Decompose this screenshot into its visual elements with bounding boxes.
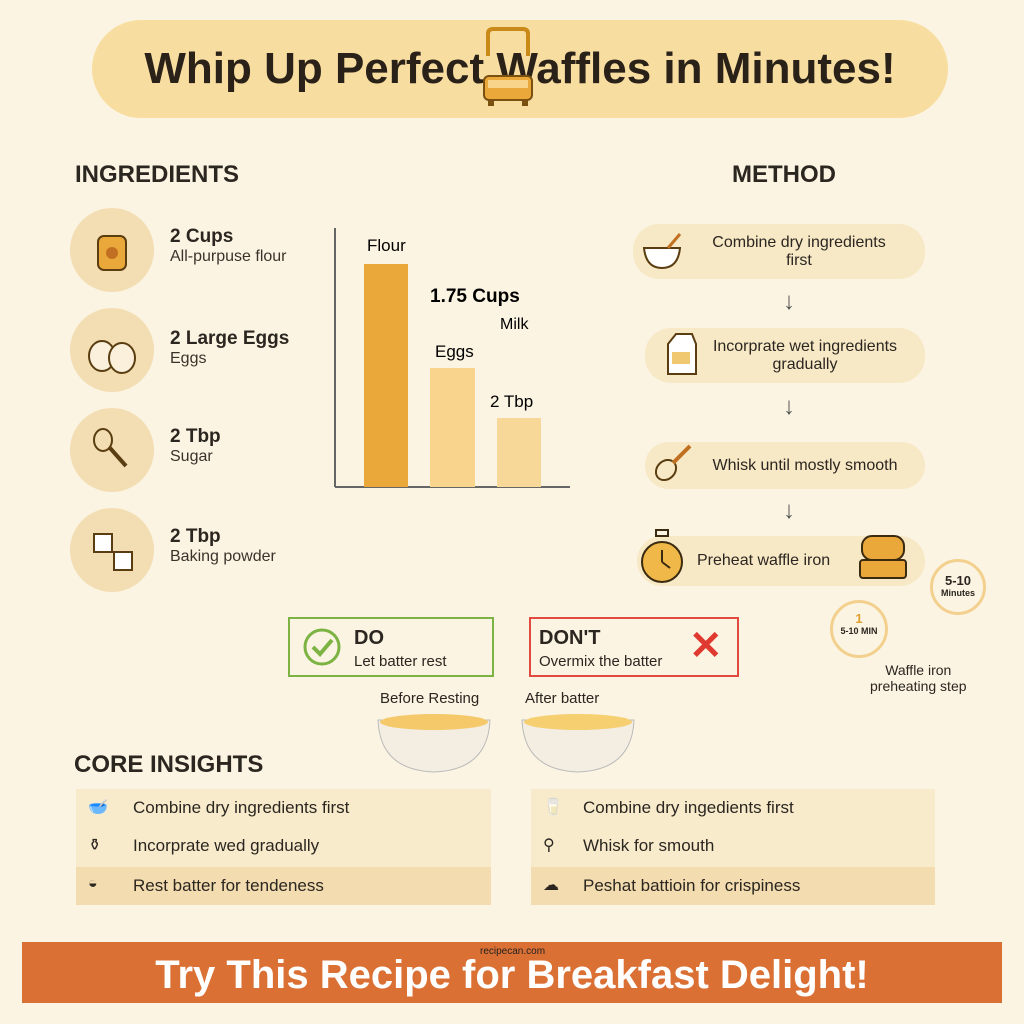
bowls: Before Resting [380, 690, 479, 707]
step 2: gradually [773, 356, 837, 372]
insights right: 🥛 [543, 799, 563, 816]
icon: bowl [642, 233, 682, 269]
insights right: ☁ [543, 877, 559, 894]
dont box: Overmix the batter [539, 653, 662, 670]
insights right: Whisk for smouth [583, 836, 714, 854]
step 2 [645, 328, 925, 383]
icon: whisk [655, 444, 692, 481]
insights left [76, 789, 491, 905]
insights left: ◒ [88, 875, 98, 892]
arrow: ↓ [783, 497, 795, 524]
ingredient: flour: All-purpuse flour [170, 248, 286, 265]
callout: preheating: 5-10 MIN [840, 626, 878, 636]
callout: preheating: preheating step [870, 678, 967, 694]
bar chart: 1.75 Cups [430, 286, 520, 307]
ingredient: sugar: Sugar [170, 448, 213, 465]
bar chart [334, 228, 570, 488]
title banner [92, 20, 948, 118]
ingredient: sugar: 2 Tbp [170, 426, 221, 447]
callout: preheating: 1 [855, 611, 863, 626]
ingredient: sugar [70, 408, 221, 492]
step 3: Whisk until mostly smooth [713, 456, 897, 474]
heading: core insights: CORE INSIGHTS [74, 751, 263, 778]
heading: ingredients: INGREDIENTS [75, 161, 239, 188]
bar chart: Eggs [435, 342, 474, 361]
bar chart: Milk [500, 316, 529, 333]
icon: waffle iron title [483, 27, 533, 106]
insights right: Peshat battioin for crispiness [583, 876, 800, 895]
insights right: ⚲ [543, 837, 555, 854]
dont box: ✕ [689, 624, 723, 668]
dont box [529, 617, 739, 677]
bowls: After batter [525, 690, 599, 707]
ingredient: eggs: 2 Large Eggs [170, 328, 289, 349]
insights left: 🥣 [88, 799, 108, 816]
ingredient: baking powder: Baking powder [170, 548, 276, 565]
title banner: Whip Up Perfect Waffles in Minutes! [144, 44, 896, 93]
badge: 5-10 minutes: Minutes [941, 588, 975, 598]
icon: timer [641, 529, 683, 583]
insights left: ⚱ [88, 837, 101, 854]
bar chart: Flour [367, 236, 406, 255]
bowls [378, 690, 634, 772]
callout: preheating [830, 600, 967, 694]
do box: DO [354, 627, 384, 649]
do box [288, 617, 494, 677]
step 2: Incorprate wet ingredients [713, 338, 897, 354]
step 1: first [786, 252, 812, 268]
insights left: Incorprate wed gradually [133, 836, 319, 854]
arrow: ↓ [783, 288, 795, 315]
step 1 [633, 224, 925, 279]
ingredient: eggs [70, 308, 289, 392]
badge: 5-10 minutes: 5-10 [945, 573, 971, 588]
step 4 [637, 536, 925, 586]
ingredient: baking powder [70, 508, 276, 592]
insights right [531, 789, 935, 905]
icon: milk carton [667, 333, 697, 375]
step 1: Combine dry ingredients [712, 234, 886, 250]
dont box: DON'T [539, 627, 600, 649]
ingredient: flour [70, 208, 286, 292]
step 4: Preheat waffle iron [697, 552, 830, 569]
insights left: Rest batter for tendeness [133, 876, 324, 895]
heading: method: METHOD [732, 161, 836, 188]
insights right: Combine dry ingedients first [583, 798, 794, 816]
ingredient: flour: 2 Cups [170, 226, 233, 247]
ingredient: baking powder: 2 Tbp [170, 526, 221, 547]
insights left: Combine dry ingredients first [133, 798, 349, 816]
arrow: ↓ [783, 393, 795, 420]
callout: preheating: Waffle iron [885, 662, 951, 678]
do box: Let batter rest [354, 653, 447, 670]
watermark: recipecan.com [480, 946, 545, 957]
step 3 [645, 442, 925, 489]
icon: waffle iron [859, 535, 907, 579]
bar chart: 2 Tbp [490, 392, 533, 411]
badge: 5-10 minutes [930, 559, 986, 615]
footer banner [22, 942, 1002, 1003]
ingredient: eggs: Eggs [170, 350, 206, 367]
footer banner: Try This Recipe for Breakfast Delight! [155, 953, 869, 997]
